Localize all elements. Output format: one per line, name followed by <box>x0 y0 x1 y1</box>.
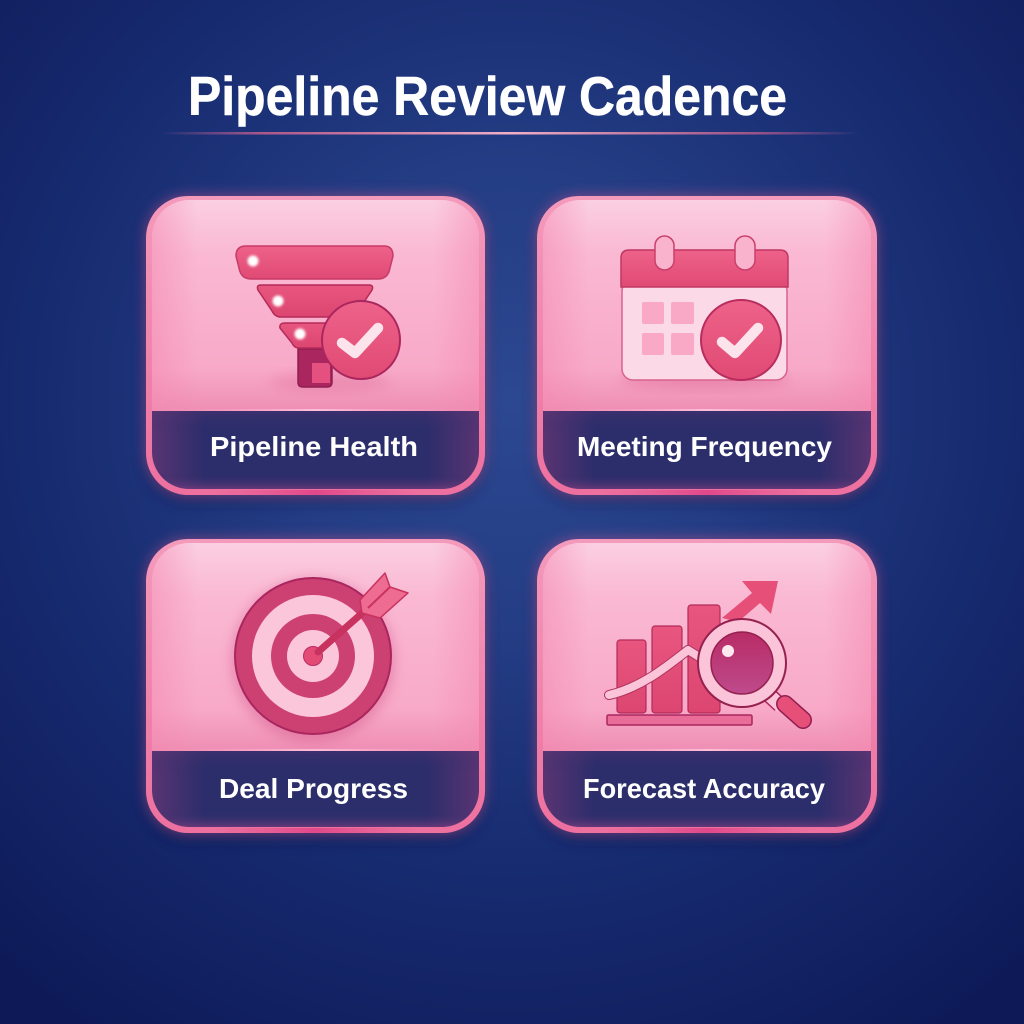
label: pipeline health: Pipeline Health <box>210 431 418 462</box>
label: deal progress: Deal Progress <box>219 773 408 804</box>
panel: deal progress <box>146 539 485 841</box>
icon: target with arrow <box>231 573 408 742</box>
icon: bar chart with magnifier <box>607 581 803 725</box>
label: forecast accuracy: Forecast Accuracy <box>583 773 825 804</box>
title underline <box>160 132 860 134</box>
icon: funnel with check <box>236 246 400 392</box>
label: meeting frequency: Meeting Frequency <box>577 431 832 462</box>
panel: meeting frequency <box>537 196 877 503</box>
icon: calendar with check <box>620 236 790 389</box>
panel: pipeline health <box>146 196 485 503</box>
title: Pipeline Review Cadence <box>188 65 787 127</box>
panel: forecast accuracy <box>537 539 877 841</box>
